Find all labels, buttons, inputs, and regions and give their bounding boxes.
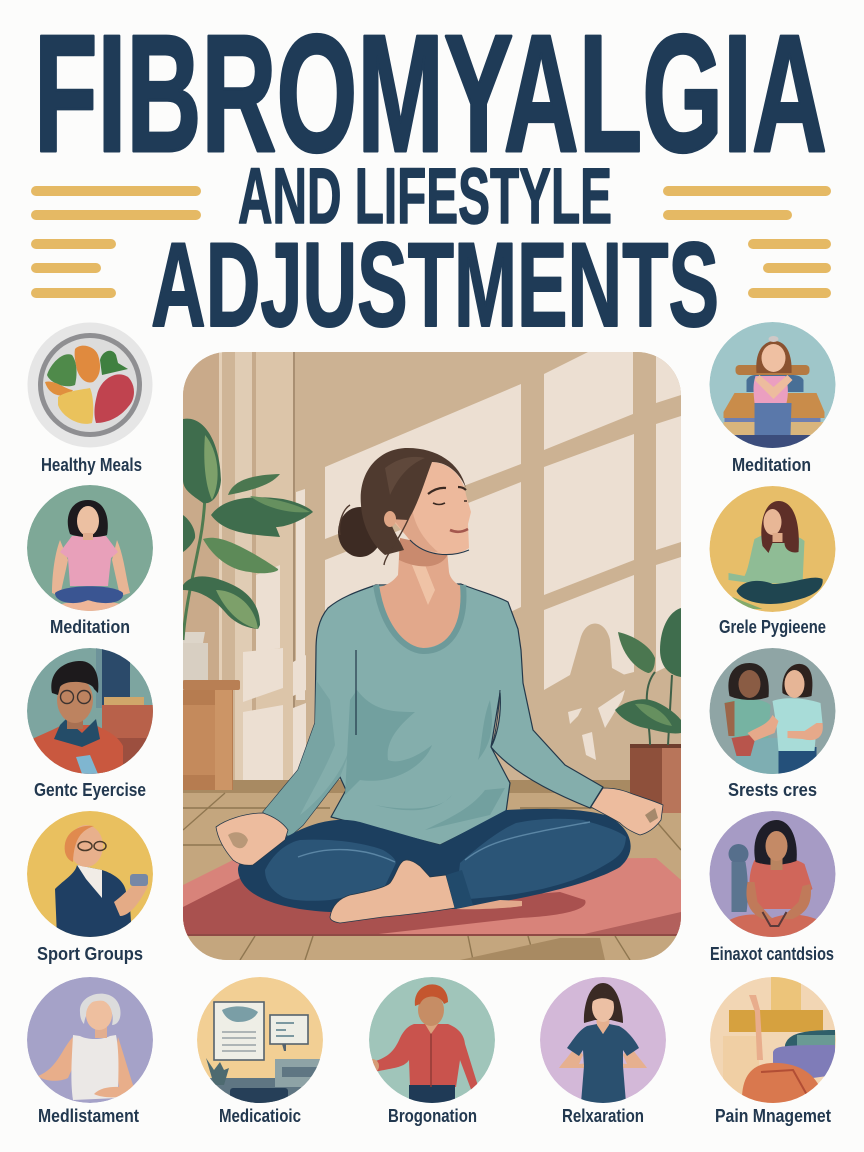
label: stress care: Srests cres — [728, 780, 817, 800]
label: relaxation options: Einaxot cantdsios — [710, 944, 834, 964]
neckline collar — [376, 585, 463, 651]
label: meditation left: Meditation — [50, 617, 130, 637]
title — [34, 1, 827, 352]
label: gentle exercise: Gentc Eyercise — [34, 780, 146, 800]
hair — [361, 448, 466, 555]
crossed legs — [238, 809, 631, 912]
curtain strips — [183, 352, 295, 782]
label: meditation right: Meditation — [732, 455, 811, 475]
icon: man in red shirt — [365, 977, 495, 1103]
icon: meditation woman on cushions — [710, 322, 836, 448]
central illustration: woman meditating — [183, 352, 681, 960]
right potted plant — [615, 608, 681, 813]
hair bun — [338, 507, 378, 557]
sweater — [263, 584, 603, 845]
right gold stripes — [663, 186, 831, 298]
sweater shading — [263, 680, 347, 836]
yoga mat — [183, 858, 681, 936]
woman — [216, 448, 663, 923]
plant shadow on wall — [544, 624, 624, 695]
right hand — [591, 788, 663, 835]
label: healthy meals: Healthy Meals — [41, 455, 142, 475]
icon: meditation woman in pink — [27, 485, 153, 618]
icon: woman in navy dress — [540, 977, 666, 1103]
face — [392, 462, 471, 555]
icon: older man with phone — [27, 811, 153, 937]
left potted plant — [183, 419, 313, 680]
icon: woman in green sitting — [710, 486, 836, 612]
icon: pain management room — [710, 977, 836, 1103]
label: medlistament: Medlistament — [38, 1106, 139, 1126]
side cabinet — [183, 680, 240, 790]
neck and chest — [378, 538, 463, 648]
icon: healthy meals plate — [28, 322, 152, 448]
label: medication: Medicatioic — [219, 1106, 301, 1126]
label: support groups: Sport Groups — [37, 944, 143, 964]
left hand — [216, 813, 288, 865]
icon: older woman in white top — [27, 977, 153, 1103]
label: brogonation: Brogonation — [388, 1106, 477, 1126]
heading: and lifestyle: AND LIFESTYLE — [238, 151, 612, 240]
icon: woman in coral top — [710, 811, 836, 937]
bare foot — [330, 860, 455, 923]
icon: documents on desk — [197, 977, 323, 1103]
label: sleep hygiene: Grele Pygieene — [719, 617, 826, 637]
left gold stripes — [31, 186, 201, 298]
label: relaxation: Relxaration — [562, 1106, 644, 1126]
icon: man with glasses — [27, 648, 154, 774]
window light on wall — [243, 352, 681, 780]
closed eyes, brows, mouth — [433, 501, 467, 504]
label: pain management: Pain Mnagemet — [715, 1106, 831, 1126]
icon: two women talking — [710, 648, 836, 775]
leg cuff — [446, 870, 473, 909]
floor — [183, 793, 681, 960]
